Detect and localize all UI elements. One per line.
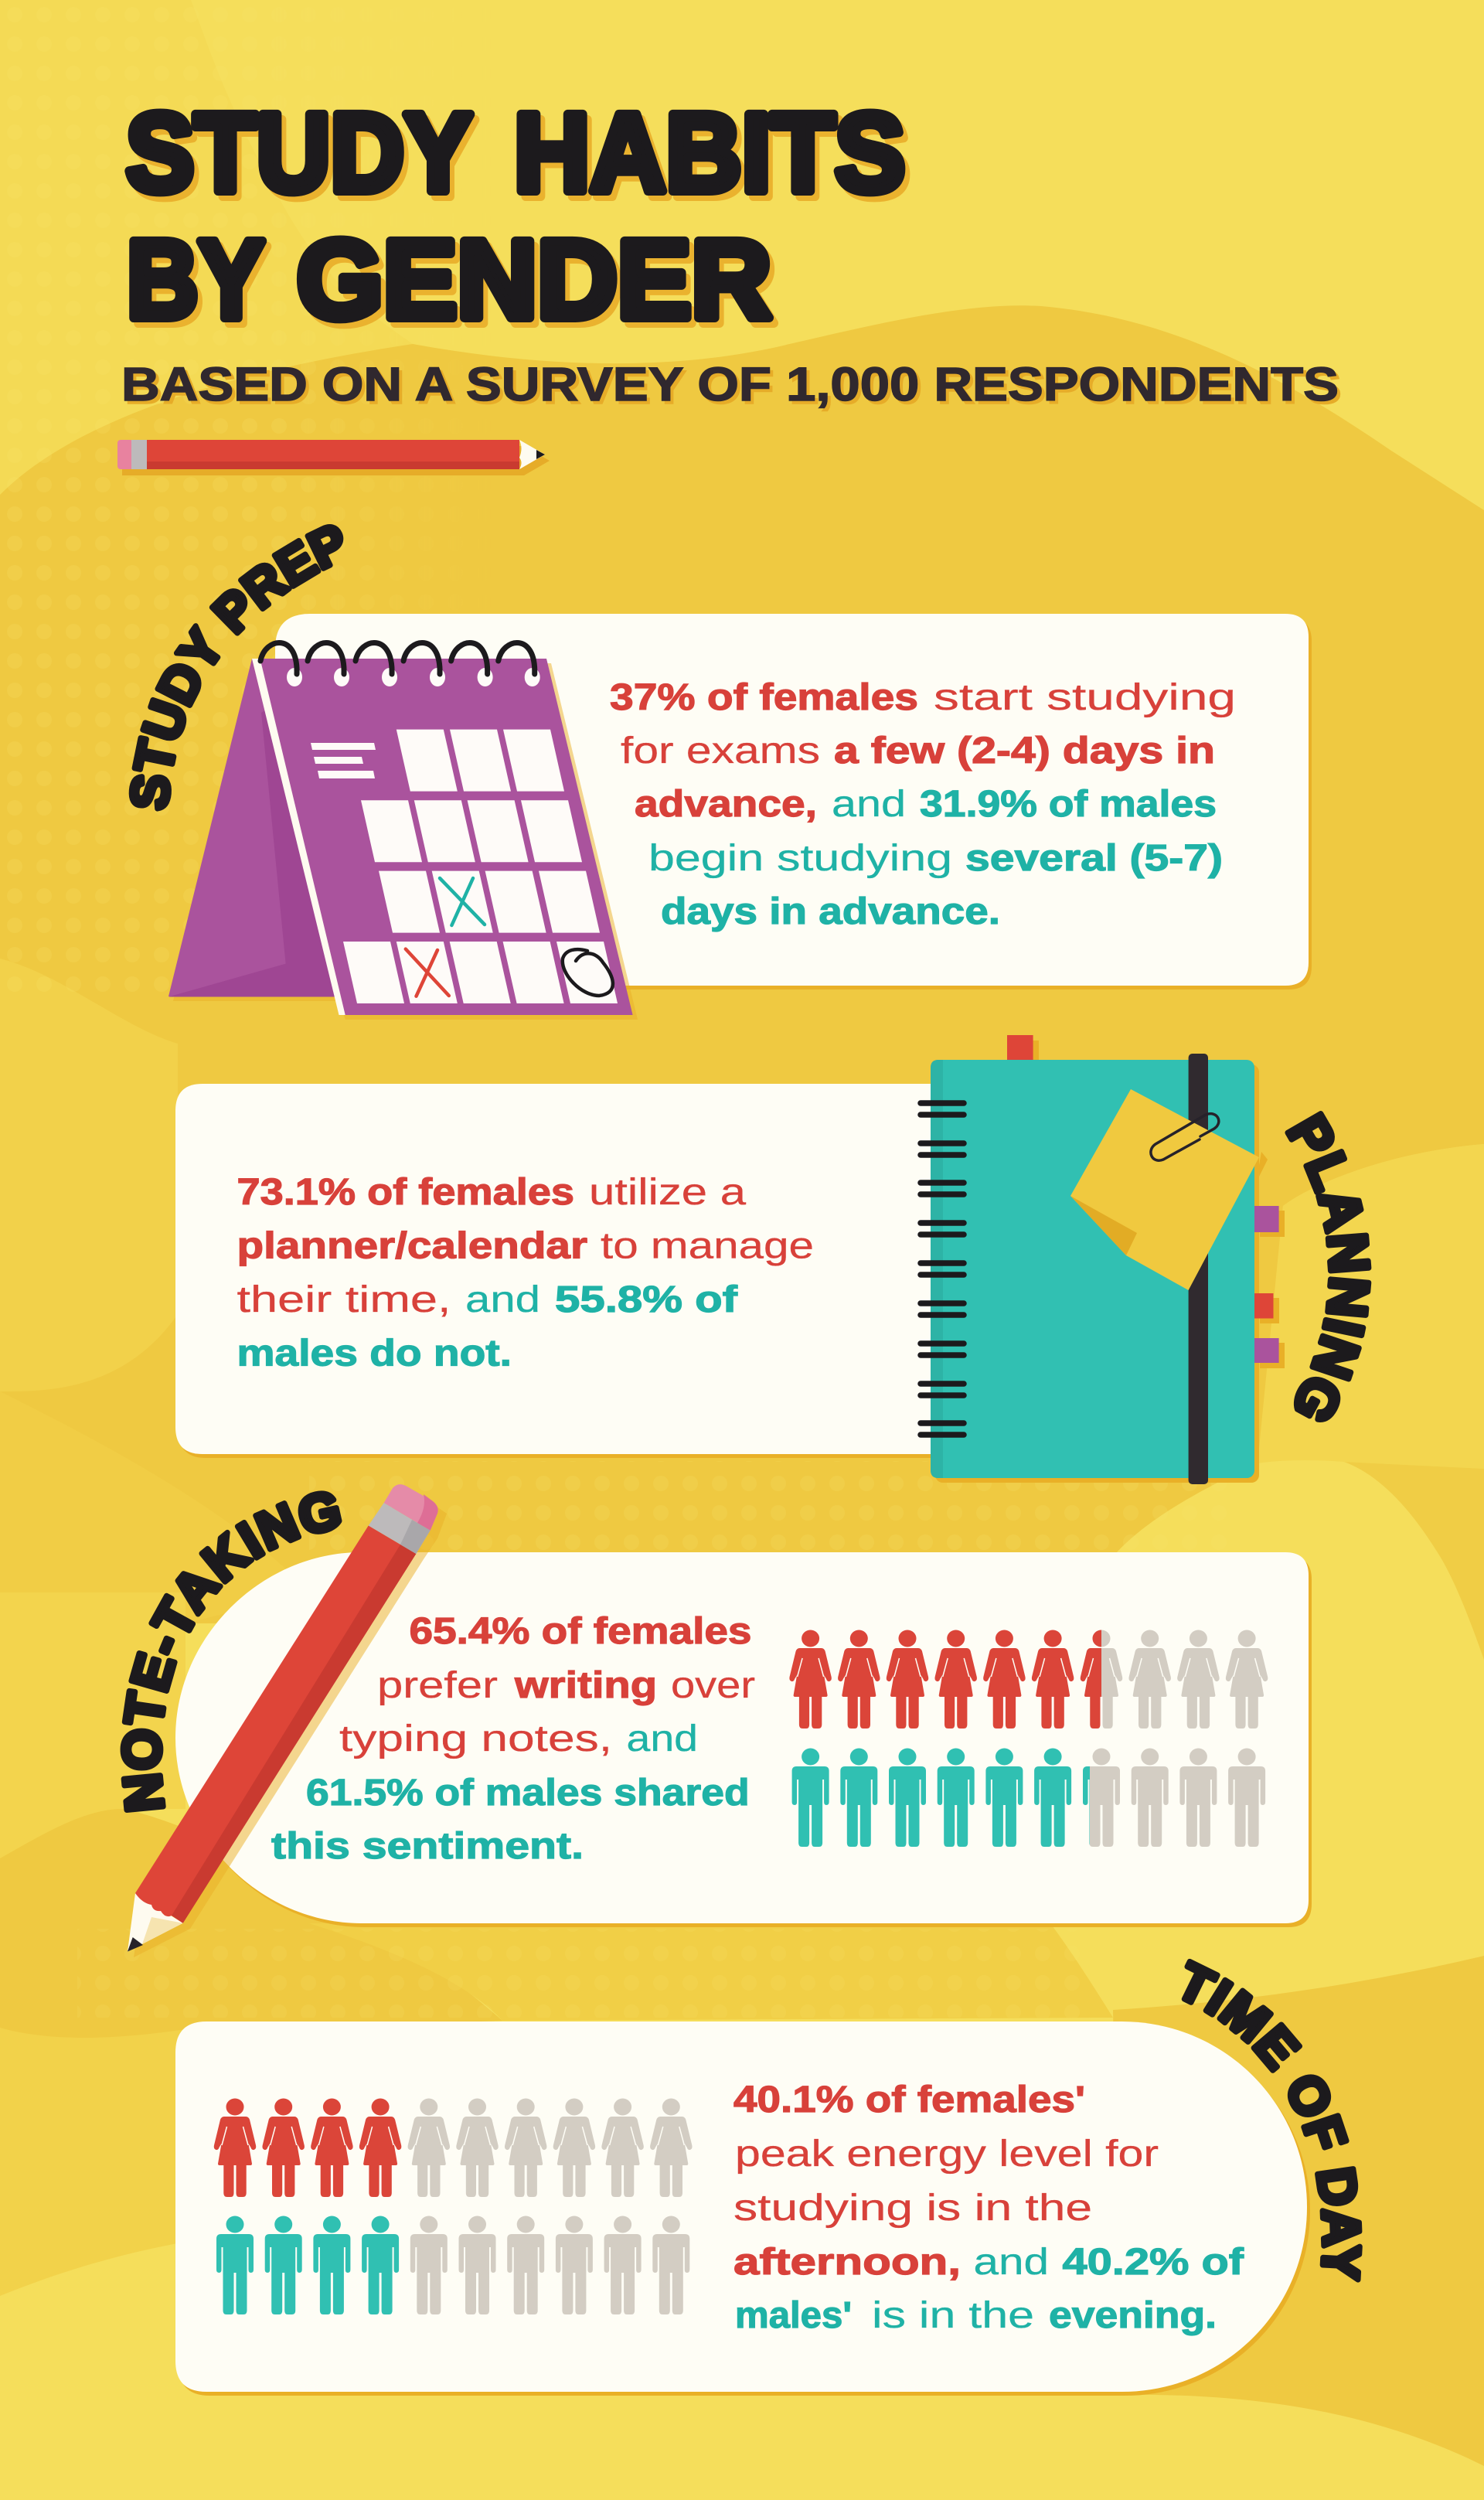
text: note-taking: 65.4% of females bbox=[410, 1611, 751, 1652]
title: HABITS bbox=[519, 96, 910, 220]
text: time of day: evening. bbox=[1049, 2295, 1217, 2336]
label: planning: PLANNING bbox=[1285, 1111, 1371, 1422]
text: planning: to manage bbox=[601, 1226, 814, 1266]
text: note-taking: writing bbox=[514, 1665, 657, 1706]
panel: time of day bbox=[175, 1959, 1363, 2396]
title: BY bbox=[131, 223, 269, 347]
card: study prep bbox=[275, 614, 1309, 986]
text: planning: 73.1% of females bbox=[237, 1172, 574, 1213]
chart: men pictogram 61.5 percent bbox=[792, 1749, 1265, 1847]
chart: women pictogram 65.4 percent bbox=[789, 1630, 1268, 1729]
text: time of day: 40.1% of females' bbox=[733, 2079, 1085, 2120]
text: planning: 55.8% of bbox=[555, 1279, 738, 1320]
text: study prep: for exams bbox=[621, 731, 820, 771]
text: time of day: studying is in the bbox=[733, 2188, 1092, 2229]
text: time of day: is in the bbox=[872, 2295, 1034, 2336]
text: time of day: males' bbox=[735, 2295, 852, 2336]
icon: desk calendar bbox=[168, 642, 638, 1020]
text: note-taking: 61.5% of males shared bbox=[306, 1773, 750, 1814]
text: planning: utilize a bbox=[589, 1172, 746, 1213]
text: note-taking: typing notes, bbox=[339, 1718, 612, 1759]
text: planning: and bbox=[465, 1279, 540, 1320]
text: study prep: 37% of females bbox=[610, 677, 918, 718]
chart: men pictogram 40.2 percent bbox=[216, 2216, 689, 2314]
title: BY bbox=[127, 217, 264, 342]
icon: large pencil bbox=[128, 1484, 447, 1957]
text: planning: males do not. bbox=[237, 1333, 512, 1374]
text: note-taking: prefer bbox=[377, 1665, 498, 1706]
text: study prep: begin studying bbox=[648, 838, 952, 879]
icon: spiral notebook bbox=[921, 1035, 1285, 1484]
card: planning bbox=[175, 1084, 958, 1454]
label: study prep: STUDY PREP bbox=[128, 524, 343, 812]
card: time of day bbox=[175, 2021, 1307, 2392]
text: study prep: a few (2-4) days in bbox=[834, 731, 1215, 771]
text: planning bbox=[237, 1172, 814, 1374]
text: planning: their time, bbox=[237, 1279, 451, 1320]
card: note-taking bbox=[175, 1552, 1309, 1923]
icon: small pencil divider bbox=[117, 440, 550, 475]
text: note-taking bbox=[271, 1611, 755, 1867]
label: note-taking: NOTE-TAKING bbox=[121, 1490, 342, 1813]
text: note-taking: and bbox=[626, 1718, 698, 1759]
label: time of day: TIME OF DAY bbox=[1181, 1959, 1363, 2283]
text: study prep bbox=[610, 677, 1236, 932]
title: HABITS bbox=[514, 90, 905, 215]
text: time of day: 40.2% of bbox=[1062, 2242, 1244, 2283]
subtitle: BASED ON A SURVEY OF 1,000 RESPONDENTS bbox=[124, 361, 1342, 414]
title: GENDER bbox=[297, 217, 771, 342]
panel: note-taking bbox=[121, 1484, 1312, 1957]
text: study prep: 31.9% of males bbox=[920, 784, 1217, 825]
text: study prep: advance, bbox=[635, 784, 817, 825]
title: STUDY bbox=[131, 96, 477, 220]
title: STUDY bbox=[126, 90, 472, 215]
text: note-taking: over bbox=[671, 1665, 755, 1706]
text: study prep: and bbox=[832, 784, 906, 825]
text: study prep: days in advance. bbox=[661, 891, 1000, 932]
panel: study prep bbox=[128, 524, 1312, 1020]
subtitle: BASED ON A SURVEY OF 1,000 RESPONDENTS bbox=[121, 358, 1339, 410]
text: time of day: afternoon, bbox=[733, 2242, 961, 2283]
text: time of day bbox=[733, 2079, 1244, 2336]
text: study prep: several (5-7) bbox=[965, 838, 1223, 879]
panel: planning bbox=[175, 1035, 1371, 1484]
title: GENDER bbox=[301, 223, 776, 347]
title bbox=[126, 90, 910, 347]
text: planning: planner/calendar bbox=[237, 1226, 587, 1266]
text: time of day: peak energy level for bbox=[735, 2134, 1159, 2175]
text: time of day: and bbox=[974, 2242, 1049, 2283]
text: study prep: start studying bbox=[934, 677, 1236, 718]
chart: women pictogram 40.1 percent bbox=[214, 2098, 693, 2197]
text: note-taking: this sentiment. bbox=[271, 1826, 584, 1867]
